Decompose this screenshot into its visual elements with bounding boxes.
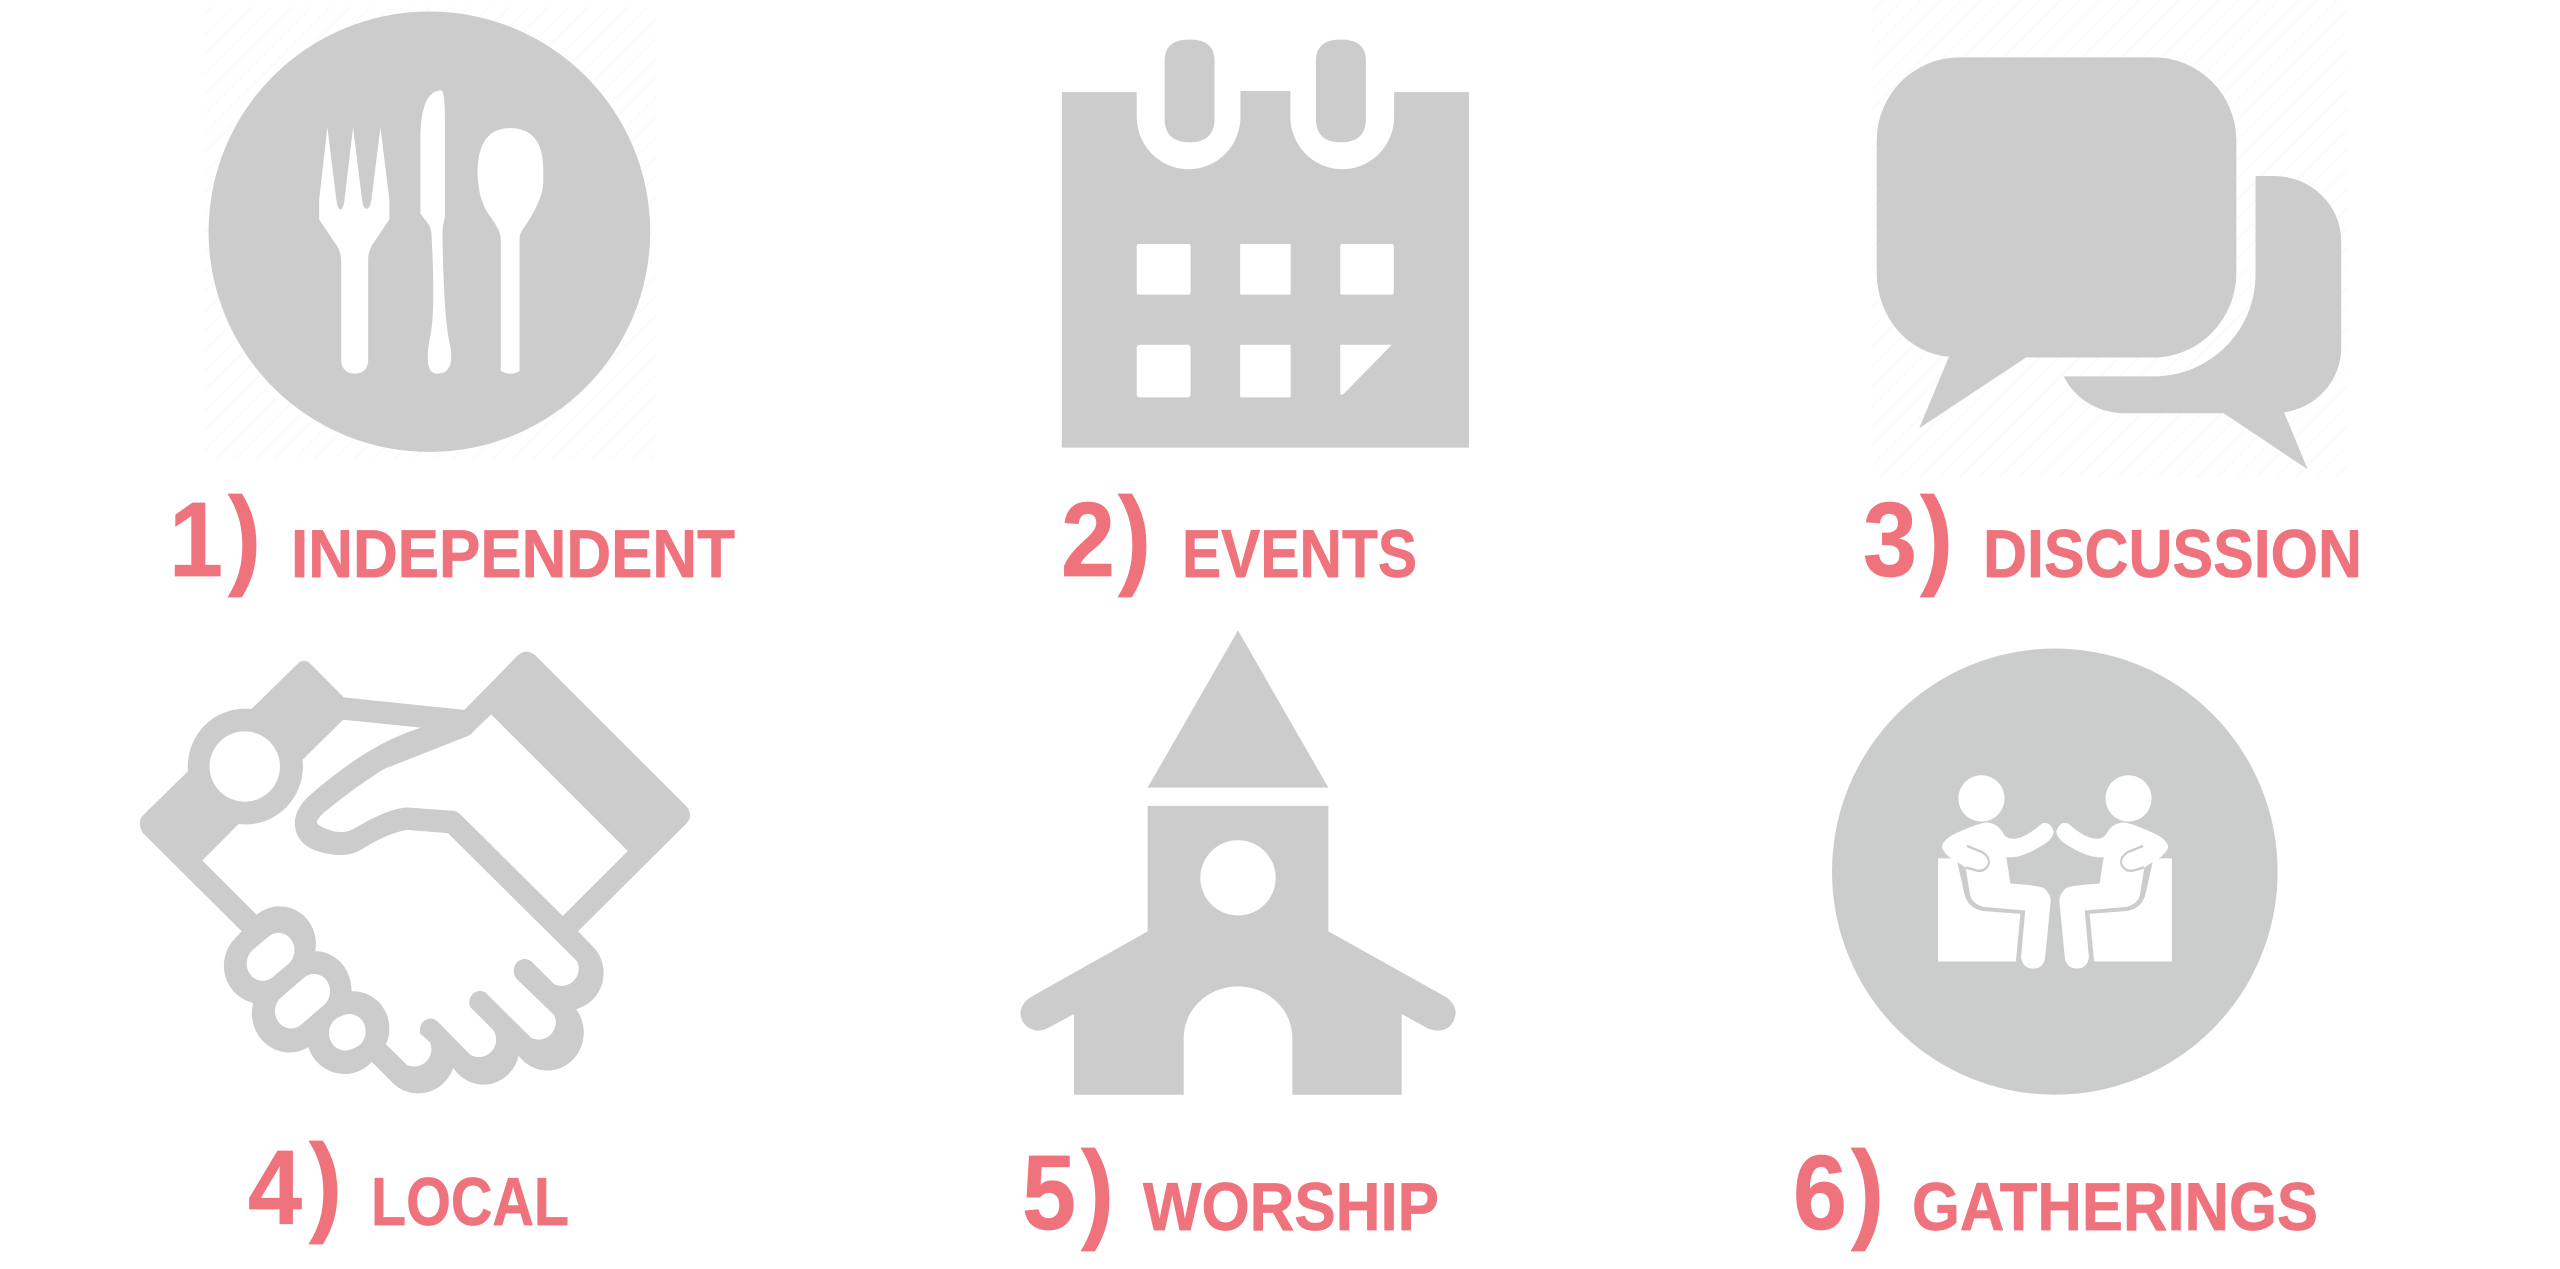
label: 6) GATHERINGS [1793, 1129, 2318, 1252]
label: 1) INDEPENDENT: ) [228, 475, 261, 598]
label: 2) EVENTS: 2 [1061, 481, 1115, 599]
panel: 3 discussion [1863, 57, 2362, 599]
label: 6) GATHERINGS: GATHERINGS [1912, 1169, 2318, 1245]
label: 4) LOCAL: LOCAL [371, 1164, 569, 1240]
label: 2) EVENTS [1061, 475, 1417, 599]
label: 1) INDEPENDENT: 1 [169, 481, 223, 599]
label: 3) DISCUSSION: DISCUSSION [1983, 516, 2362, 592]
label: 4) LOCAL: ) [309, 1122, 342, 1245]
label: 1) INDEPENDENT: INDEPENDENT [291, 516, 735, 592]
icon: speech bubbles [1877, 57, 2341, 469]
icon: calendar [1062, 40, 1469, 448]
label: 1) INDEPENDENT [169, 475, 735, 599]
icon: church [1020, 630, 1456, 1095]
label: 3) DISCUSSION: ) [1920, 475, 1953, 598]
label: 4) LOCAL [248, 1122, 569, 1247]
panel: 1 independent [169, 11, 735, 599]
label: 2) EVENTS: EVENTS [1182, 516, 1417, 592]
label: 4) LOCAL: 4 [248, 1129, 302, 1247]
label: 5) WORSHIP: WORSHIP [1143, 1169, 1439, 1245]
label: 5) WORSHIP: ) [1081, 1129, 1114, 1252]
label: 2) EVENTS: ) [1118, 475, 1151, 598]
panel: 6 gatherings [1793, 649, 2318, 1252]
icon: two seated people in circle [1832, 649, 2278, 1095]
panel: 2 events [1061, 40, 1469, 599]
label: 3) DISCUSSION: 3 [1863, 481, 1917, 599]
panel: 4 local [140, 652, 690, 1247]
label: 5) WORSHIP: 5 [1022, 1134, 1076, 1252]
label: 6) GATHERINGS: 6 [1793, 1134, 1847, 1252]
icon: fork, knife and spoon in circle [209, 11, 650, 452]
label: 5) WORSHIP [1022, 1129, 1439, 1252]
label: 3) DISCUSSION [1863, 475, 2362, 599]
icon: handshake [140, 652, 690, 1093]
label: 6) GATHERINGS: ) [1851, 1129, 1884, 1252]
panel: 5 worship [1020, 630, 1456, 1252]
